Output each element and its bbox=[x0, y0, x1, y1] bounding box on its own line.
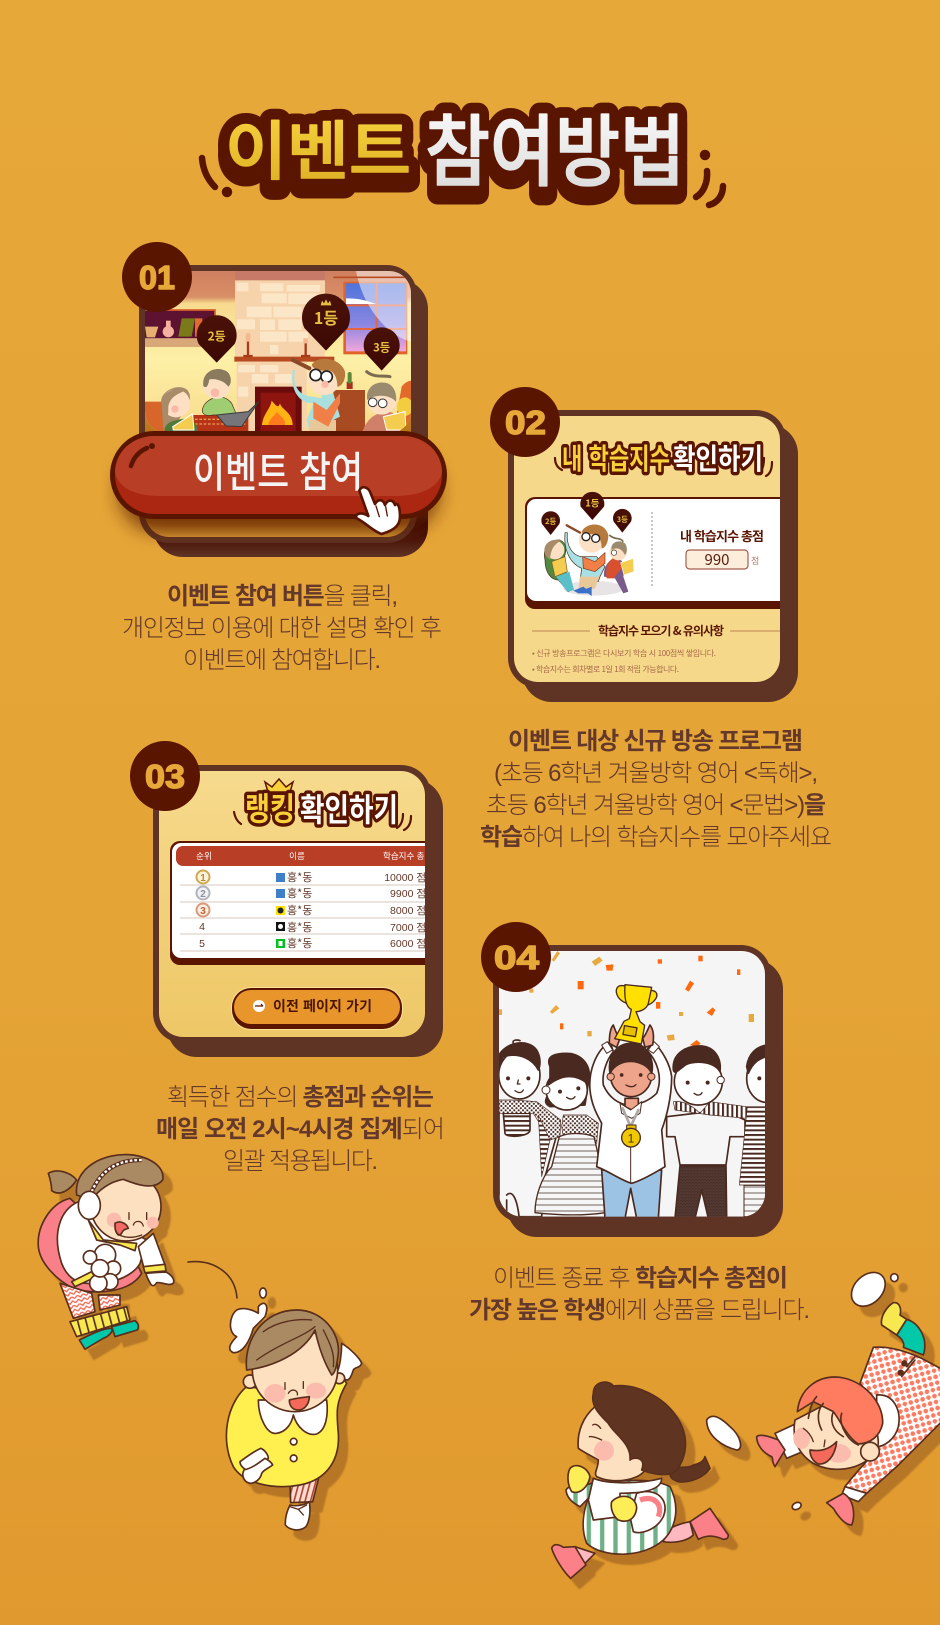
number badge 03 bbox=[130, 741, 200, 811]
heading: check my study index: 내 학습지수 bbox=[562, 436, 670, 478]
ranking table: 홍*동 bbox=[287, 869, 312, 885]
right girl bbox=[363, 372, 406, 431]
pin: rank 1: 1등 bbox=[314, 305, 338, 329]
event join button bbox=[110, 431, 447, 532]
boy with laptop bbox=[202, 369, 259, 427]
notes list bbox=[532, 649, 716, 673]
ranking table: 6000 점 bbox=[390, 936, 426, 951]
event join button: 이벤트 참여 bbox=[193, 439, 363, 500]
ranking table: 홍*동 bbox=[287, 902, 312, 918]
character: girl with snowball bbox=[38, 1155, 174, 1349]
heading: check ranking: 랭킹 bbox=[245, 784, 295, 830]
pin: rank 3 bbox=[364, 327, 400, 371]
white score card bbox=[525, 497, 780, 609]
number badge 02 bbox=[490, 387, 560, 457]
icon: hand cursor bbox=[356, 487, 400, 534]
text: step 2 description: (초등 6학년 겨울방학 영어 <독해>, bbox=[494, 760, 818, 787]
title bbox=[202, 90, 723, 210]
text: step 2 description: 학습하여 나의 학습지수를 모아주세요 bbox=[480, 824, 832, 851]
right boy bbox=[667, 1046, 747, 1218]
ranking table: 1 bbox=[200, 873, 206, 884]
panel 3 shadow and frame bbox=[153, 765, 443, 1057]
ranking table: 학습지수 총점 bbox=[383, 850, 432, 862]
notes list: • 학습지수는 회차별로 1일 1회 적립 가능합니다. bbox=[532, 664, 679, 675]
heading: check my study index: 확인하기 bbox=[673, 436, 763, 478]
title decorations bbox=[202, 153, 723, 205]
winners illustration with trophy bbox=[499, 951, 787, 1218]
score box 990 bbox=[686, 549, 759, 570]
pin: rank 2 bbox=[197, 315, 237, 363]
panel: step 2 bbox=[508, 410, 827, 702]
middle girl bbox=[535, 1053, 605, 1215]
text: step 2 description: 이벤트 대상 신규 방송 프로그램 bbox=[508, 728, 803, 755]
heading: check my study index bbox=[554, 440, 774, 478]
text: step 1 description: 개인정보 이용에 대한 설명 확인 후 bbox=[122, 615, 442, 642]
pin: rank 3: 3등 bbox=[373, 339, 390, 355]
title yellow words: 이벤트 bbox=[225, 101, 411, 193]
heading: check ranking: 랭킹 bbox=[245, 784, 295, 830]
title outline: 참여방법 bbox=[425, 98, 685, 210]
text: step 2 description bbox=[480, 728, 832, 851]
panel 2 shadow and frame bbox=[508, 410, 798, 702]
title white words: 참여방법 bbox=[425, 90, 685, 202]
panel 1 shadow and frame bbox=[139, 265, 428, 557]
notes heading: 학습지수 모으기 & 유의사항 bbox=[598, 622, 724, 639]
study kids illustration: 2등 bbox=[545, 516, 556, 527]
character: girl in yellow dress bbox=[226, 1288, 362, 1530]
number badge 04: 04 bbox=[494, 939, 540, 976]
ranking table: 2 bbox=[200, 889, 206, 900]
heading: check ranking: 확인하기 bbox=[300, 785, 398, 831]
panel 4 shadow and frame bbox=[493, 945, 783, 1237]
text: step 1 description bbox=[122, 583, 442, 674]
notes list: • 신규 방송프로그램은 다시보기 학습 시 100점씩 쌓입니다. bbox=[532, 648, 716, 659]
center winner: 1 bbox=[628, 1131, 635, 1145]
number badge 03: 03 bbox=[145, 758, 185, 795]
classroom fireplace scene bbox=[145, 271, 413, 433]
heading: check my study index: 확인하기 bbox=[673, 436, 763, 478]
left girl bbox=[161, 387, 198, 433]
text: step 4 description bbox=[469, 1265, 810, 1324]
text: step 1 description: 이벤트 참여 버튼을 클릭, bbox=[167, 583, 398, 610]
throw arc bbox=[188, 1262, 237, 1298]
heading: check ranking bbox=[234, 779, 411, 831]
pin: rank 1 bbox=[302, 294, 350, 351]
panel: step 3 bbox=[153, 765, 456, 1057]
pin: rank 2: 2등 bbox=[208, 328, 226, 345]
button: go to previous page: 이전 페이지 가기 bbox=[273, 996, 372, 1016]
text: step 2 description: 초등 6학년 겨울방학 영어 <문법>)을 bbox=[486, 792, 826, 819]
text: step 4 description: 가장 높은 학생에게 상품을 드립니다. bbox=[469, 1297, 810, 1324]
study kids illustration bbox=[541, 492, 634, 596]
text: step 3 description: 매일 오전 2시~4시경 집계되어 bbox=[156, 1116, 445, 1143]
number badge 04 bbox=[481, 922, 551, 992]
ranking table: 이름 bbox=[289, 850, 305, 862]
ranking table: 10000 점 bbox=[384, 870, 426, 885]
ranking table: 4 bbox=[199, 921, 205, 933]
ranking table: 홍*동 bbox=[287, 919, 312, 935]
text: step 4 description: 이벤트 종료 후 학습지수 총점이 bbox=[493, 1265, 788, 1292]
character: crawling kid bbox=[757, 1266, 940, 1525]
heading: check ranking: 확인하기 bbox=[300, 785, 398, 831]
text: step 3 description: 획득한 점수의 총점과 순위는 bbox=[167, 1084, 434, 1111]
button: go to previous page bbox=[231, 987, 403, 1030]
title outline: 이벤트 bbox=[225, 101, 411, 193]
left boy bbox=[499, 1040, 561, 1217]
title outline: 이벤트 bbox=[225, 110, 411, 202]
ranking table: 3 bbox=[200, 906, 206, 917]
ranking table: 5 bbox=[199, 938, 205, 950]
ranking table: 7000 점 bbox=[390, 920, 426, 935]
center winner bbox=[590, 985, 672, 1218]
text: step 1 description: 이벤트에 참여합니다. bbox=[183, 647, 381, 674]
study kids illustration: 1등 bbox=[585, 496, 600, 510]
title outline bbox=[225, 90, 685, 210]
character: running girl bbox=[552, 1382, 741, 1578]
ranking table: 8000 점 bbox=[390, 903, 426, 918]
score box 990: 990 bbox=[705, 549, 729, 570]
heading: check my study index: 내 학습지수 bbox=[562, 436, 670, 478]
panel: step 4 bbox=[493, 945, 787, 1237]
study kids illustration: 3등 bbox=[617, 514, 628, 525]
ranking table: 홍*동 bbox=[287, 885, 312, 901]
text: step 3 description: 일괄 적용됩니다. bbox=[223, 1148, 378, 1175]
ranking table: 순위 bbox=[196, 850, 212, 862]
ranking table: 홍*동 bbox=[287, 935, 312, 951]
ranking table bbox=[170, 841, 425, 965]
center boy with book bbox=[292, 359, 345, 433]
confetti bbox=[499, 951, 754, 1047]
score box 990: 점 bbox=[751, 554, 759, 567]
score label: 내 학습지수 총점 bbox=[680, 526, 764, 545]
number badge 01: 01 bbox=[139, 259, 175, 296]
far right person bbox=[739, 1044, 765, 1216]
number badge 02: 02 bbox=[505, 404, 546, 441]
ranking table: 9900 점 bbox=[390, 886, 426, 901]
number badge 01 bbox=[122, 242, 192, 312]
panel: step 1 bbox=[38, 242, 940, 1578]
text: step 3 description bbox=[156, 1084, 445, 1175]
title outline: 참여방법 bbox=[425, 90, 685, 202]
